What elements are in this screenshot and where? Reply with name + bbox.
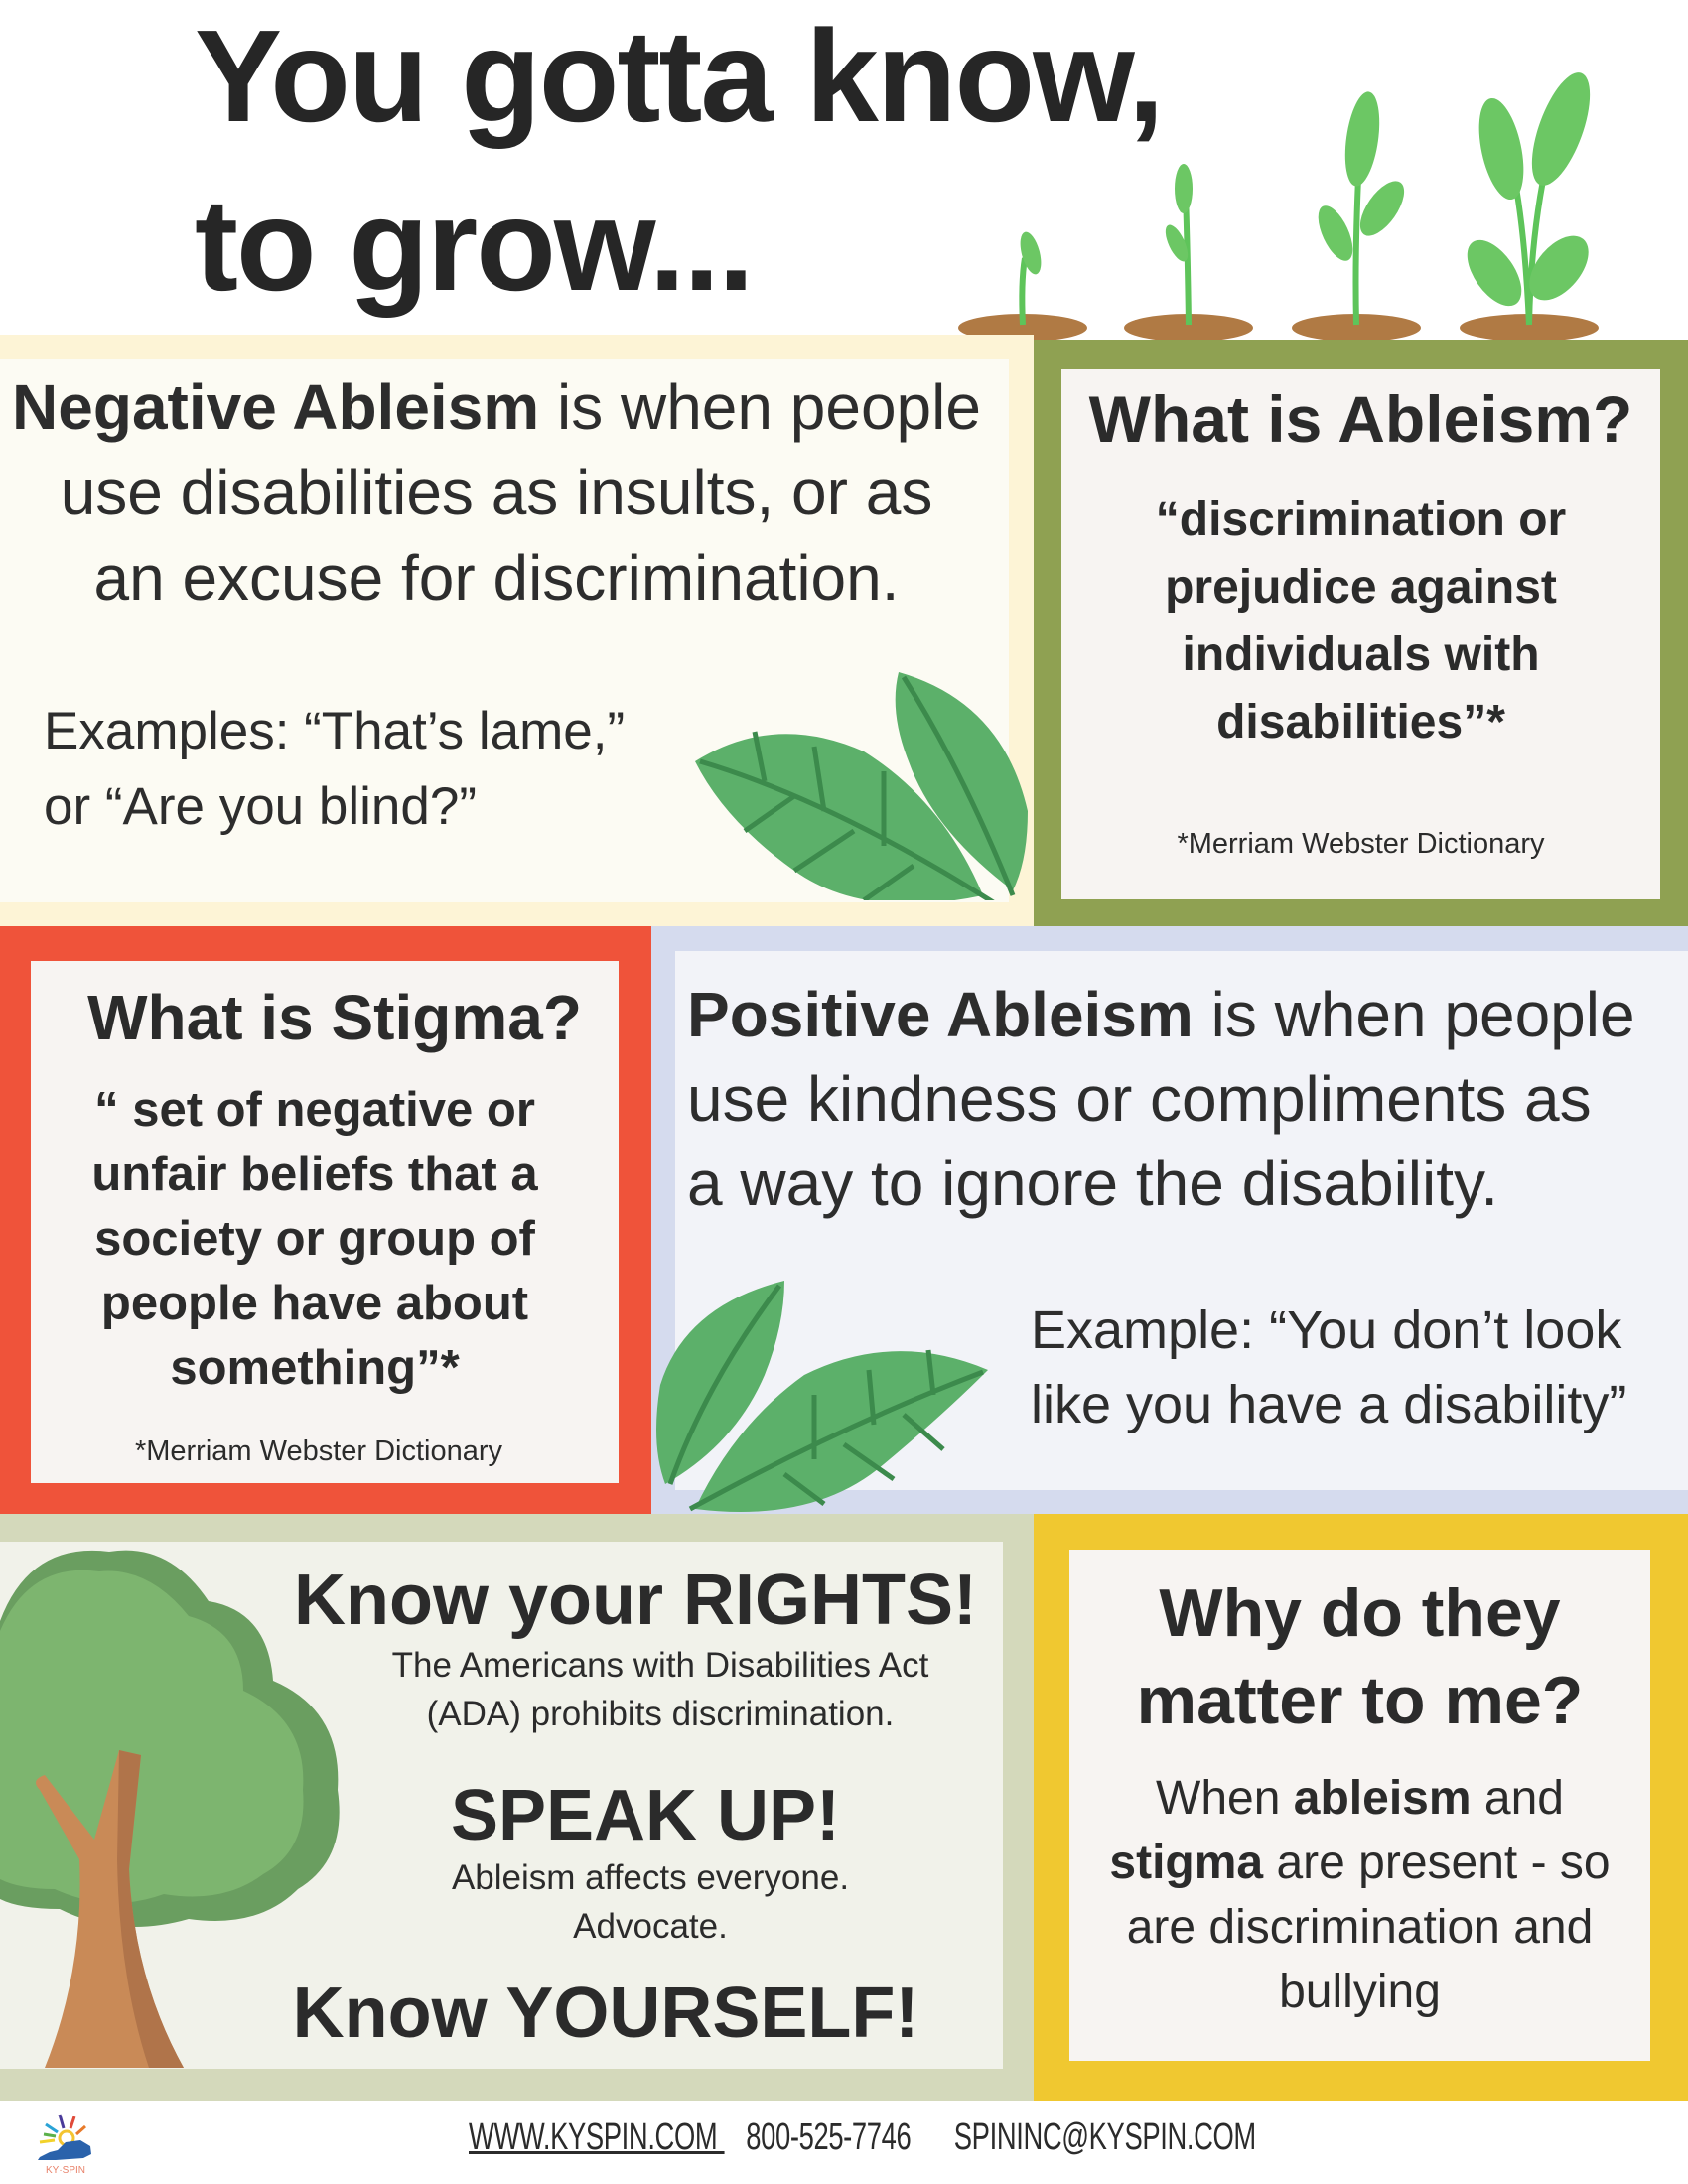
text: ADA: (ADA) prohibits discrimination. <box>427 1695 894 1733</box>
text: advocate <box>452 1858 849 1946</box>
heading: speak up: SPEAK UP! <box>451 1776 840 1855</box>
icon: KY SPIN logo <box>38 2115 91 2176</box>
text: negative ableism definition <box>12 371 981 614</box>
heading: why do they matter: Why do they <box>1159 1575 1561 1651</box>
text: ableism definition <box>1156 493 1566 749</box>
text: why explanation: bullying <box>1279 1966 1441 2018</box>
text: advocate: Advocate. <box>573 1907 728 1946</box>
title <box>195 3 1163 318</box>
title: to grow... <box>195 172 753 318</box>
text: source: *Merriam Webster Dictionary <box>1177 828 1545 860</box>
icon: growing sprouts <box>958 72 1599 340</box>
text: why explanation: stigma are present - so <box>1109 1837 1611 1889</box>
text: advocate: Ableism affects everyone. <box>452 1858 849 1897</box>
heading: why do they matter <box>1137 1575 1583 1738</box>
text: positive example <box>1031 1300 1626 1434</box>
text: stigma definition <box>91 1083 538 1395</box>
heading: know your rights: Know your RIGHTS! <box>294 1561 977 1640</box>
icon: leaves <box>695 672 1028 900</box>
text: why explanation: are discrimination and <box>1127 1901 1593 1954</box>
text: negative ableism definition: Negative Ableism is when people <box>12 371 981 443</box>
text: positive example: Example: “You don’t look <box>1031 1300 1621 1360</box>
text: stigma definition: people have about <box>101 1277 528 1330</box>
panel: negative ableism <box>0 335 1034 926</box>
panel: why do they matter <box>1034 1514 1688 2101</box>
heading: know yourself: Know YOURSELF! <box>293 1974 918 2053</box>
title: You gotta know, <box>195 3 1163 149</box>
text: negative examples: or “Are you blind?” <box>44 777 477 836</box>
panel: know your rights <box>0 1514 1034 2101</box>
text: stigma definition: something”* <box>170 1341 460 1395</box>
text: stigma definition: society or group of <box>94 1212 535 1266</box>
text: why explanation <box>1109 1772 1611 2018</box>
text: negative examples: Examples: “That’s lame,” <box>44 702 625 760</box>
icon: tree <box>0 1551 340 2068</box>
text: ADA: The Americans with Disabilities Act <box>392 1646 928 1685</box>
text: negative examples <box>44 702 625 836</box>
text: negative ableism definition: use disabilities as insults, or as <box>61 457 932 528</box>
panel: what is ableism <box>1034 340 1688 926</box>
text: source: *Merriam Webster Dictionary <box>135 1435 502 1467</box>
icon: KY SPIN logo: KY·SPIN <box>46 2165 85 2176</box>
panel: positive ableism <box>651 926 1688 1514</box>
text: positive ableism definition: use kindness or compliments as <box>687 1063 1592 1135</box>
text: ableism definition: individuals with <box>1182 628 1540 681</box>
icon: leaves <box>656 1281 988 1512</box>
text: ADA <box>392 1646 929 1733</box>
heading: what is ableism: What is Ableism? <box>1089 382 1632 456</box>
text: why explanation: When ableism and <box>1156 1772 1564 1825</box>
text: negative ableism definition: an excuse for discrimination. <box>93 542 900 614</box>
text: positive example: like you have a disability” <box>1031 1375 1626 1434</box>
text: ableism definition: prejudice against <box>1165 561 1557 614</box>
text: stigma definition: “ set of negative or <box>94 1083 535 1137</box>
panel: what is stigma <box>0 926 651 1514</box>
footer contact: WWW.KYSPIN.COM 800-525-7746 SPININC@KYSPIN.COM <box>469 2116 1256 2158</box>
text: ableism definition: disabilities”* <box>1216 696 1505 749</box>
heading: what is stigma: What is Stigma? <box>87 982 582 1053</box>
text: stigma definition: unfair beliefs that a <box>91 1148 538 1201</box>
text: positive ableism definition: Positive Ableism is when people <box>687 979 1635 1050</box>
heading: why do they matter: matter to me? <box>1137 1663 1583 1738</box>
text: positive ableism definition: a way to ignore the disability. <box>687 1148 1498 1219</box>
text: ableism definition: “discrimination or <box>1156 493 1566 546</box>
text: positive ableism definition <box>687 979 1635 1219</box>
